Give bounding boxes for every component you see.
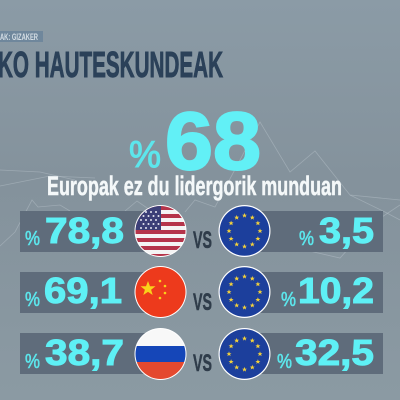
- panel: EU value: %: [299, 228, 314, 250]
- panel: EU value: %: [281, 289, 296, 311]
- vs label: VS: [193, 350, 212, 377]
- icon: Russia flag: [134, 328, 186, 380]
- icon: EU flag: [218, 205, 270, 257]
- source tag: AK: GIZAKER: [0, 32, 38, 43]
- panel: China value: %: [25, 289, 40, 311]
- panel: China value: 69,1: [44, 270, 122, 311]
- panel: USA value: 78,8: [45, 210, 124, 251]
- icon: EU flag: [218, 266, 270, 318]
- panel: EU value: [260, 332, 383, 374]
- headline figure: 68 percent: %: [129, 134, 161, 176]
- panel: EU value: 3,5: [319, 210, 374, 251]
- panel: EU value: %: [277, 351, 292, 373]
- vs label: VS: [193, 289, 212, 316]
- icon: EU flag: [218, 328, 270, 380]
- row: USA vs EU: [20, 205, 383, 257]
- source tag: [0, 31, 43, 43]
- vs label: VS: [193, 227, 212, 254]
- headline figure: 68 percent: [129, 96, 261, 187]
- panel: Russia value: [20, 332, 145, 374]
- panel: Russia value: %: [25, 351, 40, 373]
- row: China vs EU: [20, 266, 383, 318]
- panel: EU value: 10,2: [298, 270, 374, 311]
- panel: EU value: [260, 210, 383, 252]
- panel: China value: [20, 270, 145, 313]
- panel: USA value: %: [25, 228, 40, 250]
- icon: China flag: [134, 266, 186, 318]
- headline figure: 68 percent: 68: [165, 96, 261, 187]
- panel: Russia value: 38,7: [45, 332, 124, 373]
- panel: EU value: 32,5: [295, 332, 374, 373]
- title: KO HAUTESKUNDEAK: [0, 44, 223, 85]
- icon: USA flag: [134, 205, 186, 257]
- row: Russia vs EU: [20, 328, 383, 380]
- panel: EU value: [260, 270, 383, 313]
- panel: USA value: [20, 210, 145, 252]
